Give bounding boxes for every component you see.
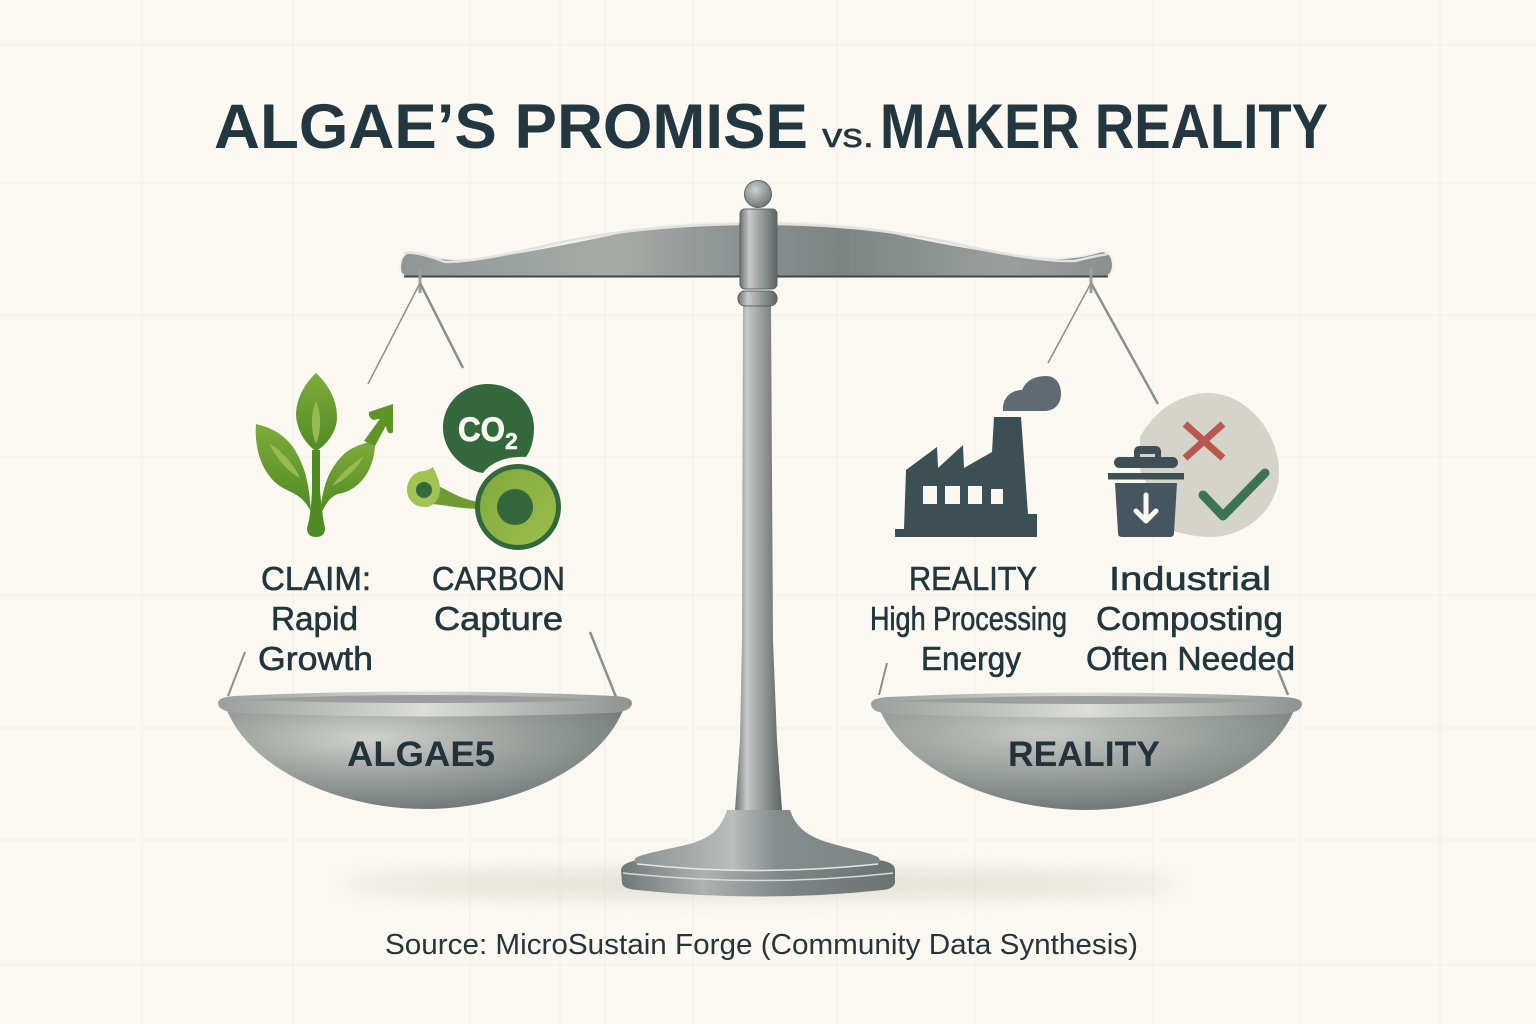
small cell: [407, 467, 440, 507]
co2 bubble: [443, 384, 534, 473]
stem: [307, 450, 325, 537]
right leaf: [320, 440, 375, 516]
label: claim rapid growth: Growth: [258, 640, 373, 677]
label: carbon capture: Capture: [434, 600, 563, 637]
center post: [740, 209, 777, 289]
label: industrial composting: Composting: [1096, 600, 1283, 637]
building: [895, 417, 1037, 537]
icon: carbon capture: 2: [505, 428, 518, 454]
title: MAKER REALITY: [880, 92, 1328, 162]
left leaf: [256, 424, 311, 512]
left pan: [218, 692, 632, 809]
label: reality high processing energy: [870, 560, 1067, 677]
blob: [1140, 393, 1279, 537]
icon: trash with check and cross: [1108, 393, 1279, 537]
label: reality high processing energy: Energy: [921, 640, 1021, 677]
title: ALGAE’S PROMISE: [214, 92, 808, 162]
bowl: [226, 708, 624, 809]
title: [214, 92, 1328, 162]
label: industrial composting: Often Needed: [1086, 640, 1295, 677]
bowl: [879, 708, 1295, 810]
rim: [871, 692, 1302, 718]
collar: [738, 291, 777, 306]
label: claim rapid growth: [258, 560, 373, 677]
icon: factory: [895, 376, 1061, 537]
red cross: [1185, 424, 1223, 458]
label: industrial composting: [1086, 560, 1295, 677]
pan label: ALGAE5: [347, 735, 495, 774]
label: reality high processing energy: REALITY: [909, 560, 1037, 597]
pan label: REALITY: [1008, 735, 1160, 774]
scale stand: [400, 180, 1113, 896]
windows: [923, 486, 1003, 504]
lid: [1114, 457, 1178, 468]
connector: [430, 484, 478, 509]
icon: sprout with growth arrow: [256, 373, 393, 537]
title: vs.: [822, 117, 874, 155]
base dome: [634, 810, 880, 870]
down arrow: [1136, 495, 1156, 521]
base disc: [621, 860, 895, 896]
shaft: [735, 306, 782, 810]
label: reality high processing energy: High Processing: [870, 600, 1067, 637]
icon: carbon capture: [407, 384, 561, 550]
bin: [1115, 483, 1177, 537]
label: claim rapid growth: CLAIM:: [261, 560, 371, 597]
smoke cloud: [1003, 376, 1061, 411]
beam: [400, 222, 1113, 277]
center leaf: [296, 373, 337, 451]
lid handle: [1134, 446, 1161, 458]
rim: [218, 692, 632, 716]
green check: [1203, 473, 1265, 516]
label: carbon capture: [432, 560, 565, 637]
right hanger wires: [879, 268, 1288, 695]
label: carbon capture: CARBON: [432, 560, 565, 597]
large cell: [475, 464, 561, 550]
floor shadow: [340, 872, 1180, 896]
source: Source: MicroSustain Forge (Community Data Synthesis): [385, 929, 1138, 961]
co2 label: CO: [458, 411, 505, 449]
finial: [744, 180, 772, 208]
label: claim rapid growth: Rapid: [271, 600, 358, 637]
growth arrow: [364, 416, 389, 446]
label: industrial composting: Industrial: [1109, 560, 1271, 597]
right pan: [871, 692, 1302, 810]
left hanger wires: [228, 268, 616, 697]
